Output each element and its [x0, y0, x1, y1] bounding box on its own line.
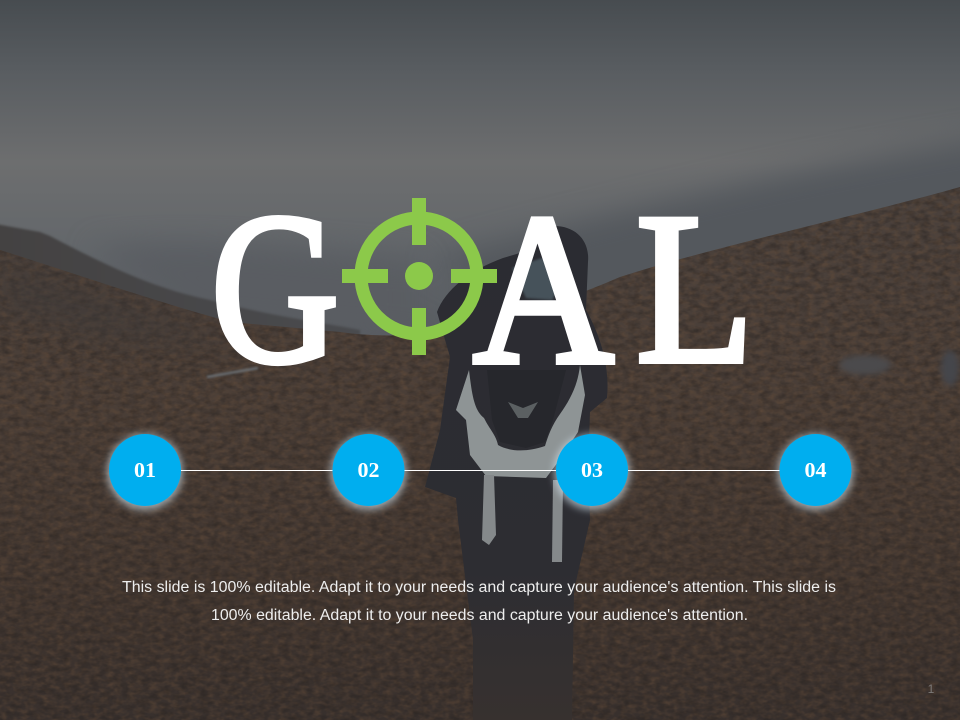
- body and jacket: [425, 226, 608, 720]
- step 04: 04: [804, 458, 827, 482]
- page number: 1: [928, 682, 935, 696]
- step 02: 02: [358, 458, 380, 482]
- backpack logo: [508, 402, 538, 418]
- hiker silhouette with backpack: [425, 226, 608, 720]
- letter L: L: [636, 169, 754, 408]
- timeline: numbered steps: [107, 434, 854, 510]
- step 01: 01: [134, 458, 156, 482]
- step 01: [107, 434, 183, 510]
- step 02: [330, 434, 406, 510]
- hanging straps: [482, 475, 496, 545]
- description text: This slide is 100% editable. Adapt it to your needs and capture your audience's attention. This slide is: [122, 579, 836, 596]
- target icon replacing letter O: [342, 198, 497, 355]
- backpack harness: [456, 365, 585, 478]
- step 04: [778, 434, 854, 510]
- description text: [122, 579, 836, 624]
- letter G: G: [211, 169, 339, 408]
- step 03: 03: [581, 458, 603, 482]
- step 03: [554, 434, 630, 510]
- camera and hands: [512, 258, 566, 300]
- title: GOAL: [211, 169, 754, 409]
- letter A: A: [473, 170, 614, 409]
- description text: 100% editable. Adapt it to your needs and capture your audience's attention.: [211, 607, 748, 624]
